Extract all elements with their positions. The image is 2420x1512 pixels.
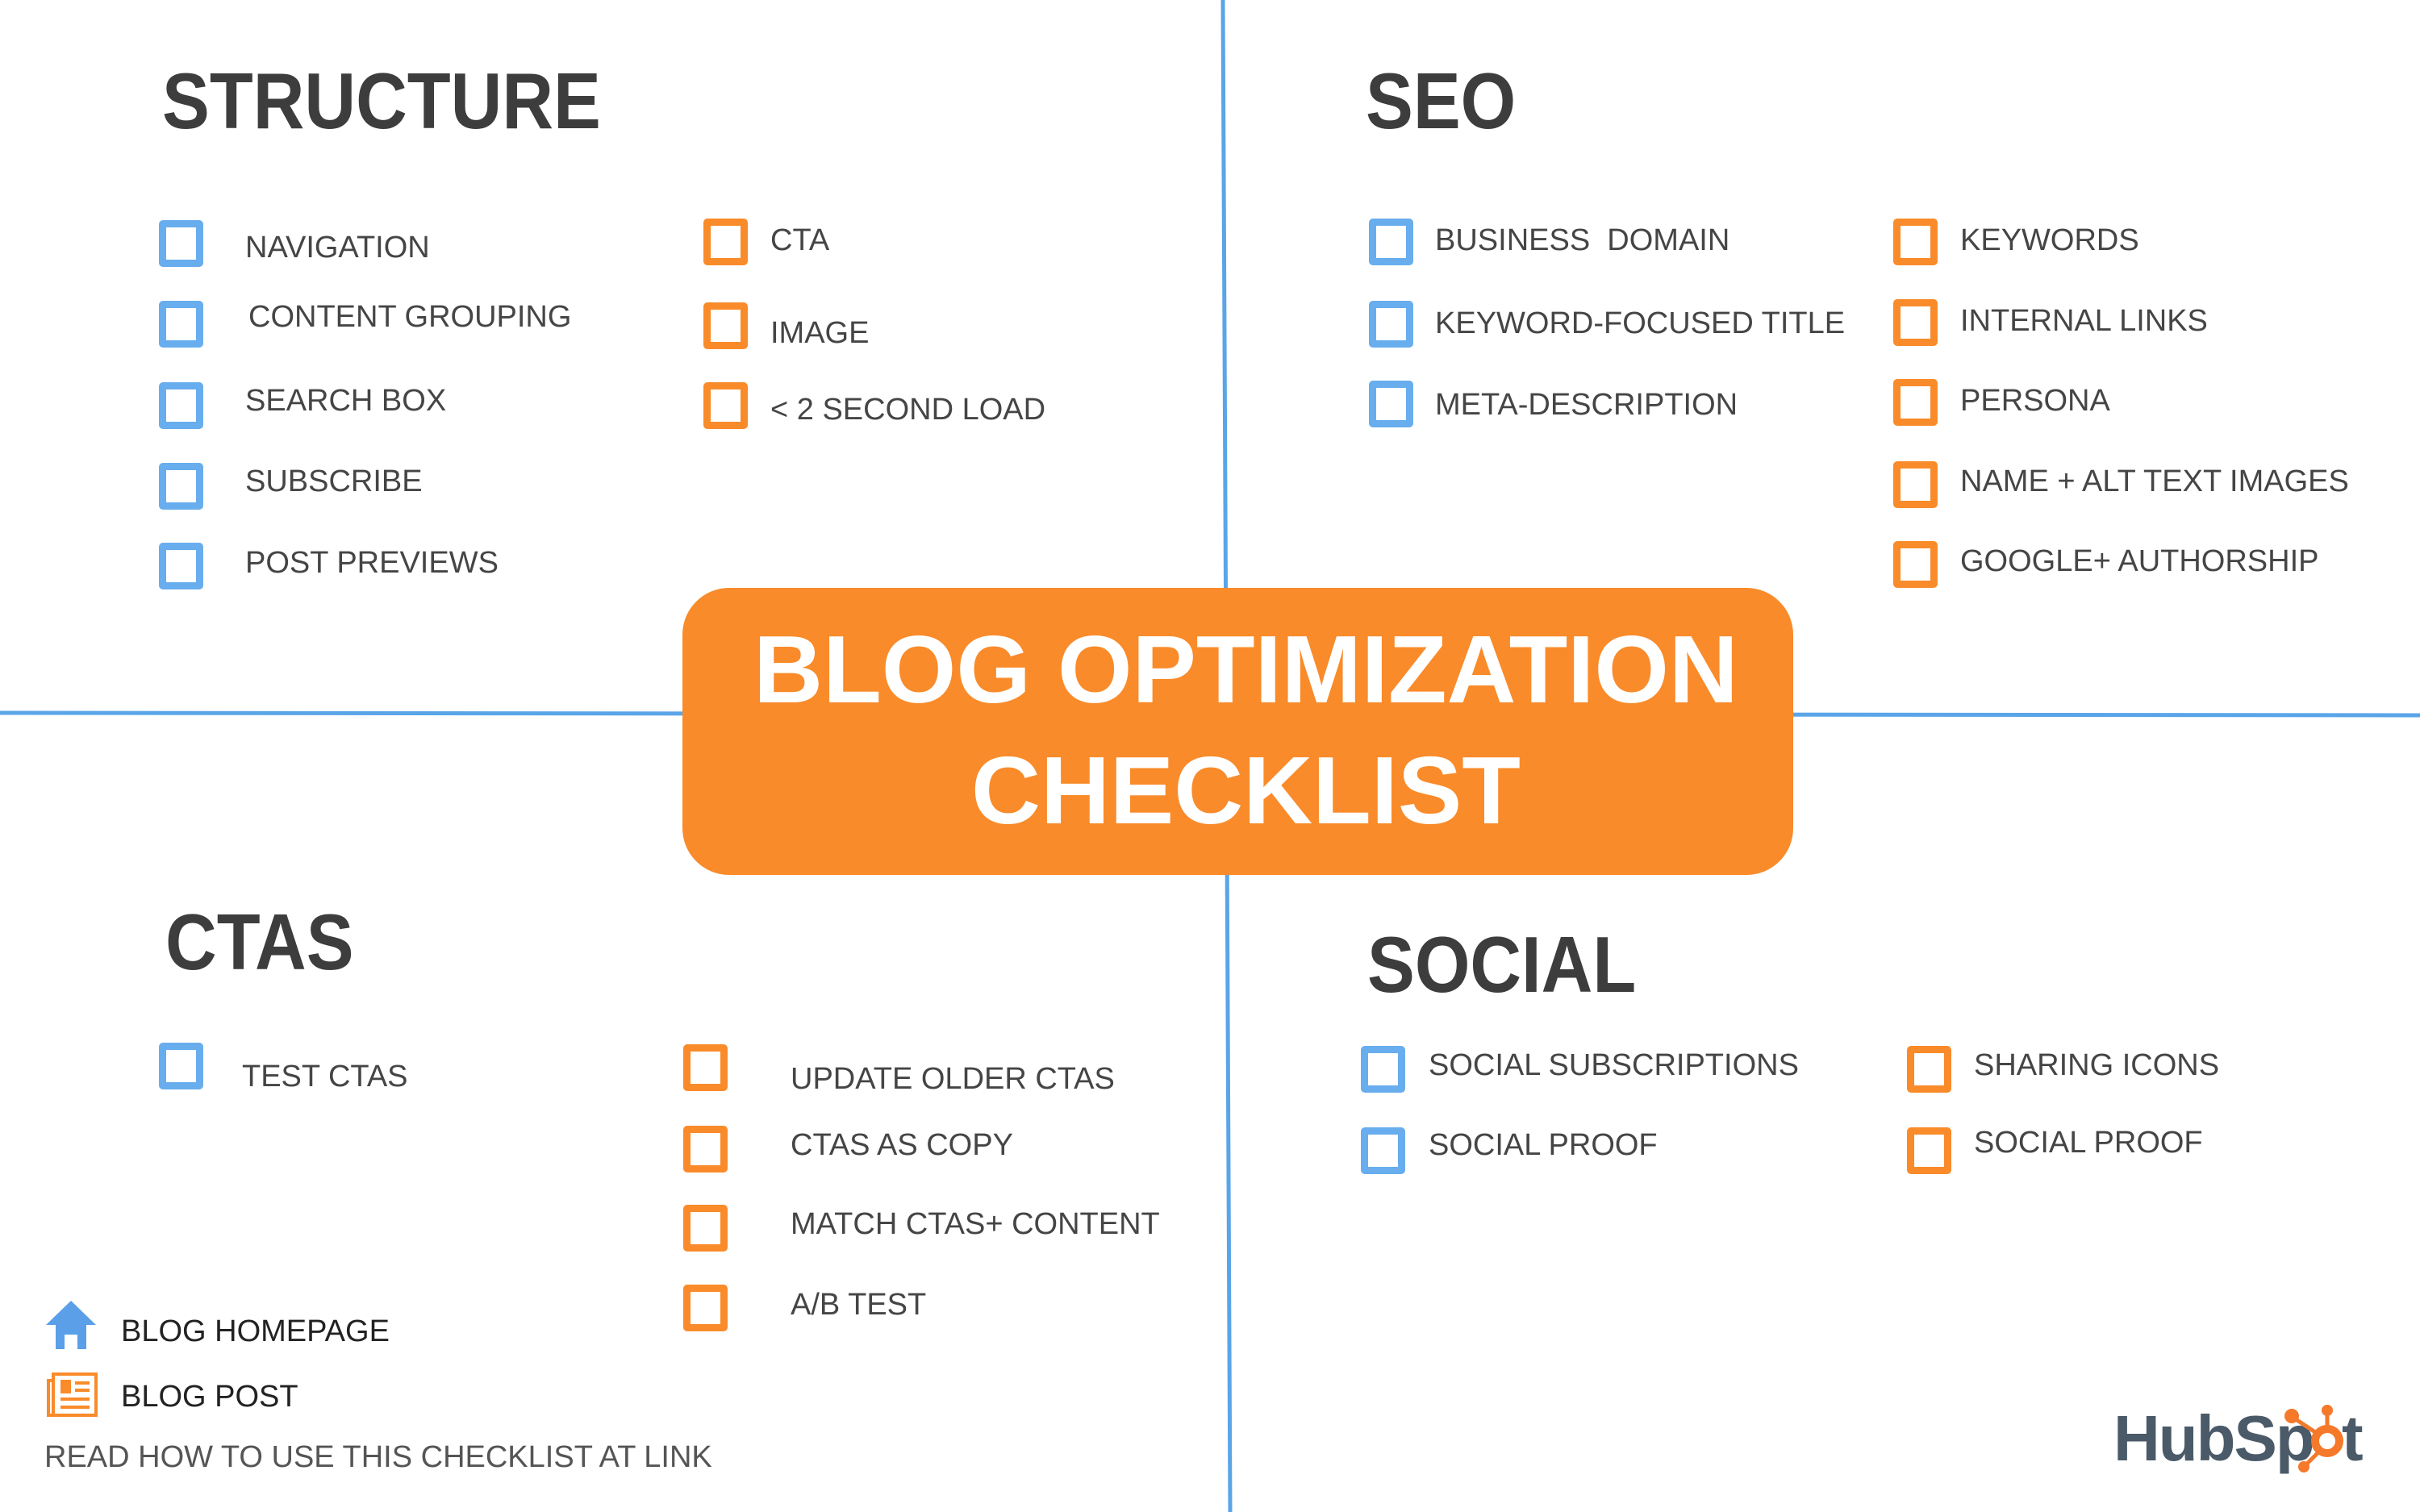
item: keyword-focused title: KEYWORD-FOCUSED TITLE [1435, 306, 1845, 340]
item: sharing icons: SHARING ICONS [1974, 1048, 2219, 1082]
panel: structure [159, 56, 1045, 589]
footer note: READ HOW TO USE THIS CHECKLIST AT LINK [44, 1440, 712, 1474]
logo: hubspot: t [2342, 1402, 2364, 1474]
item: business domain: BUSINESS DOMAIN [1435, 223, 1729, 257]
icon: newspaper [47, 1372, 98, 1417]
panel: social [1361, 920, 2219, 1174]
item: social proof blue [1361, 1127, 1658, 1174]
legend: blog post: BLOG POST [121, 1380, 298, 1414]
item: keyword-focused title [1369, 301, 1845, 348]
item: post previews: POST PREVIEWS [245, 546, 499, 580]
item: search box [159, 382, 446, 429]
item: social subscriptions [1361, 1046, 1799, 1093]
heading: seo: SEO [1366, 56, 1516, 145]
panel: ctas [159, 898, 1160, 1331]
item: a/b test: A/B TEST [791, 1288, 926, 1322]
item: navigation [159, 220, 430, 267]
logo: hubspot: HubSp [2113, 1402, 2314, 1474]
item: persona: PERSONA [1960, 384, 2110, 418]
item: google+ authorship: GOOGLE+ AUTHORSHIP [1960, 544, 2318, 578]
item: meta-description [1369, 381, 1738, 427]
item: ctas as copy: CTAS AS COPY [791, 1128, 1013, 1162]
item: persona [1893, 379, 2110, 426]
title text: CHECKLIST [971, 737, 1521, 844]
item: navigation: NAVIGATION [245, 231, 430, 264]
item: image [703, 302, 869, 350]
item: name + alt text images: NAME + ALT TEXT IMAGES [1960, 464, 2349, 498]
item: content grouping: CONTENT GROUPING [248, 300, 571, 334]
item: social subscriptions: SOCIAL SUBSCRIPTIONS [1429, 1048, 1799, 1082]
item: social proof blue: SOCIAL PROOF [1429, 1128, 1658, 1162]
item: subscribe [159, 463, 423, 510]
legend: blog post [47, 1372, 298, 1417]
heading: ctas: CTAS [165, 898, 354, 986]
title box [682, 588, 1793, 875]
panel: seo [1366, 56, 2349, 588]
item: match ctas+ content [683, 1205, 1160, 1252]
icon: house [46, 1301, 96, 1349]
legend [44, 1301, 712, 1474]
item: search box: SEARCH BOX [245, 384, 446, 418]
heading: structure: STRUCTURE [162, 56, 601, 145]
item: cta: CTA [770, 223, 829, 257]
item: social proof orange: SOCIAL PROOF [1974, 1126, 2203, 1160]
item: business domain [1369, 219, 1729, 265]
item: internal links [1893, 299, 2208, 346]
heading: social: SOCIAL [1367, 920, 1636, 1009]
item: a/b test [683, 1285, 926, 1331]
title text: BLOG OPTIMIZATION [753, 616, 1738, 723]
item: google+ authorship [1893, 541, 2318, 588]
item: post previews [159, 543, 499, 589]
item: image: IMAGE [770, 316, 869, 350]
item: social proof orange [1907, 1126, 2203, 1174]
item: cta [703, 219, 829, 265]
item: meta-description: META-DESCRIPTION [1435, 388, 1738, 422]
legend: blog homepage: BLOG HOMEPAGE [121, 1314, 390, 1348]
item: subscribe: SUBSCRIBE [245, 464, 423, 498]
item: 2 second load: < 2 SECOND LOAD [770, 393, 1045, 427]
item: test ctas: TEST CTAS [242, 1060, 408, 1093]
item: update older ctas [683, 1044, 1115, 1096]
item: sharing icons [1907, 1046, 2219, 1093]
item: match ctas+ content: MATCH CTAS+ CONTENT [791, 1207, 1160, 1241]
item: keywords: KEYWORDS [1960, 223, 2139, 257]
item: ctas as copy [683, 1126, 1013, 1173]
title text [753, 616, 1738, 844]
legend: blog homepage [46, 1301, 390, 1349]
item: internal links: INTERNAL LINKS [1960, 304, 2208, 338]
item: test ctas [159, 1043, 408, 1093]
item: content grouping [159, 300, 571, 348]
item: 2 second load [703, 382, 1045, 429]
item: keywords [1893, 219, 2139, 265]
item: name + alt text images [1893, 461, 2349, 508]
item: update older ctas: UPDATE OLDER CTAS [791, 1062, 1115, 1096]
